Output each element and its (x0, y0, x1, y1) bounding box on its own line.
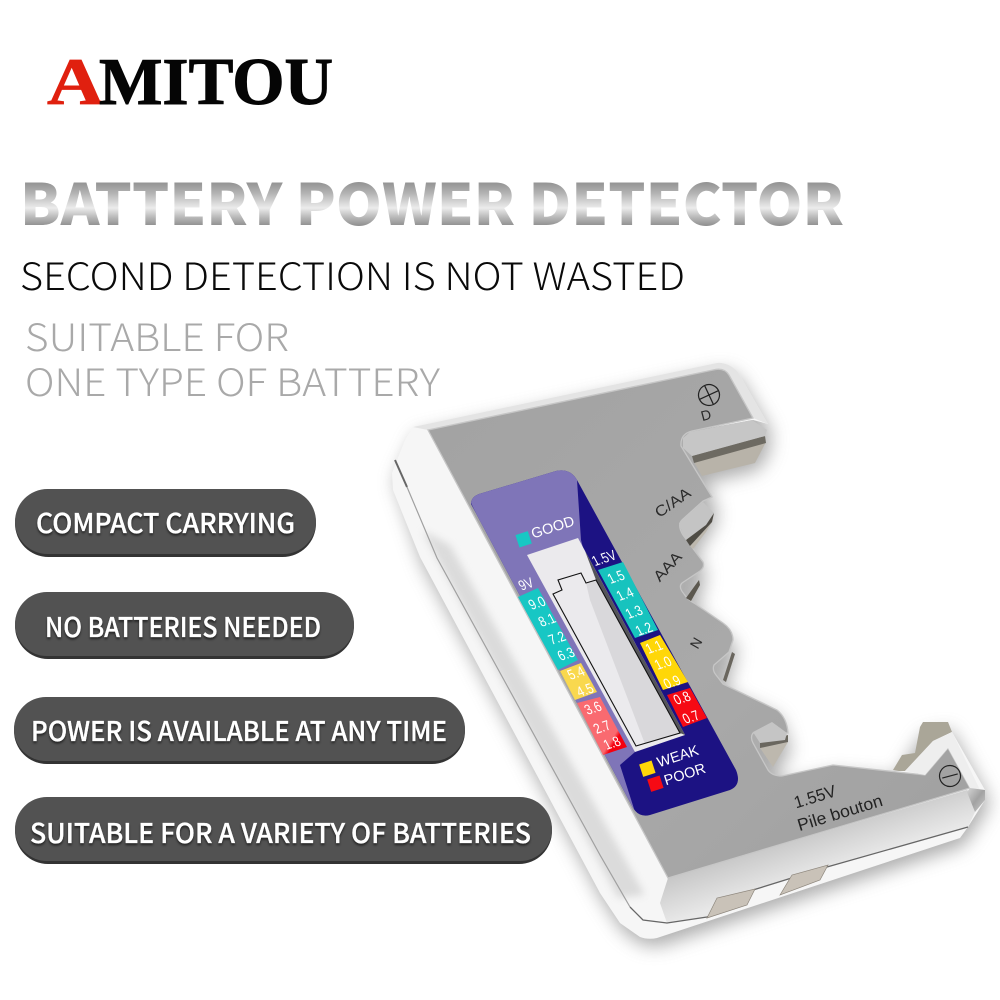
slot label: N: N (687, 635, 705, 651)
window inner shadow (585, 551, 685, 735)
negative terminal rear contact (893, 722, 952, 772)
left scale: 9V: 3.6 (581, 698, 605, 718)
right scale: 1.5V: 1.4 (613, 584, 637, 604)
logo: AMITOU: A (47, 45, 104, 119)
left scale: 9V: 4.5 (573, 680, 597, 700)
top edge bevel (413, 363, 768, 430)
right scale: 1.5V: 1.0 (651, 653, 675, 673)
left edge mottling (422, 530, 645, 898)
right scale: 1.5V: 0.8 (670, 688, 694, 708)
right scale: 1.5V: 1.2 (632, 619, 656, 639)
battery contact: AAA (686, 580, 700, 601)
icon: minus terminal (937, 763, 963, 789)
pill: no batteries needed: NO BATTERIES NEEDED (45, 606, 321, 645)
left scale: 9V: 9.0 (525, 593, 549, 613)
text block: suitable for one type of battery: SUITABLE FOR (25, 307, 289, 362)
right scale: 1.5V: 1.1 (642, 637, 666, 657)
pill: compact carrying (15, 489, 316, 557)
left scale: 9V: 7.2 (545, 628, 569, 648)
battery contact: D (683, 420, 767, 476)
legend: weak (639, 743, 701, 777)
right scale: 1.5V (589, 547, 707, 727)
product: battery tester device (392, 363, 988, 946)
pill: power is available at any time (14, 697, 465, 764)
left scale: 9V (515, 574, 627, 755)
right scale: 1.5V: 0.7 (679, 707, 703, 727)
right scale: 1.5V: 1.5 (604, 567, 628, 587)
slot label: D: D (699, 406, 713, 424)
left scale: 9V: 2.7 (590, 717, 614, 737)
legend: poor: POOR (662, 761, 708, 789)
negative terminal bevel (905, 732, 980, 790)
battery contact: N (723, 652, 735, 682)
label panel (465, 462, 738, 816)
battery contact: coin (753, 722, 788, 767)
headline: battery power detector: BATTERY POWER DETECTOR (20, 160, 844, 242)
top face (428, 369, 970, 878)
display shaded half (586, 580, 680, 744)
front corner shading (967, 788, 985, 812)
device drop shadow (395, 371, 988, 946)
print: 1.55V pile bouton: 1.55V (792, 781, 839, 812)
logo: AMITOU: MITOU (99, 45, 333, 119)
right scale: 1.5V: 1.3 (622, 602, 646, 622)
legend: poor (647, 761, 708, 792)
left scale: 9V: 8.1 (535, 610, 559, 630)
front edge band (660, 790, 980, 923)
seam lines (395, 460, 968, 923)
pill: suitable for a variety of batteries (15, 797, 552, 864)
light purple area (465, 462, 636, 815)
left scale: 9V: 1.8 (600, 733, 624, 753)
icon: plus terminal (695, 381, 723, 409)
slot label: AAA: AAA (650, 549, 686, 585)
display window (527, 538, 685, 752)
left scale: 9V: 9V (515, 574, 537, 594)
pill: suitable for a variety of batteries: SUITABLE FOR A VARIETY OF BATTERIES (30, 812, 531, 851)
port connectors (707, 865, 828, 918)
left scale: 9V: 6.3 (554, 644, 578, 664)
legend: good (515, 514, 577, 548)
text block: suitable for one type of battery: ONE TYPE OF BATTERY (25, 352, 440, 407)
device outer shell (392, 363, 985, 939)
slot label: C/AA: C/AA (652, 485, 694, 521)
subtitle: second detection: SECOND DETECTION IS NOT WASTED (20, 246, 685, 301)
print: 1.55V pile bouton: Pile bouton (795, 791, 885, 835)
left scale: 9V: 5.4 (564, 663, 588, 683)
right scale: 1.5V: 1.5V (589, 547, 619, 569)
legend: weak: WEAK (655, 743, 701, 771)
pill: power is available at any time: POWER IS AVAILABLE AT ANY TIME (31, 710, 447, 749)
legend: good: GOOD (529, 514, 577, 542)
text block: suitable for one type of battery (25, 307, 440, 407)
right scale: 1.5V: 0.9 (660, 672, 684, 692)
pill: compact carrying: COMPACT CARRYING (36, 502, 295, 541)
battery outline (553, 573, 680, 746)
battery contact: C/AA (679, 502, 714, 549)
pill: no batteries needed (15, 592, 354, 659)
